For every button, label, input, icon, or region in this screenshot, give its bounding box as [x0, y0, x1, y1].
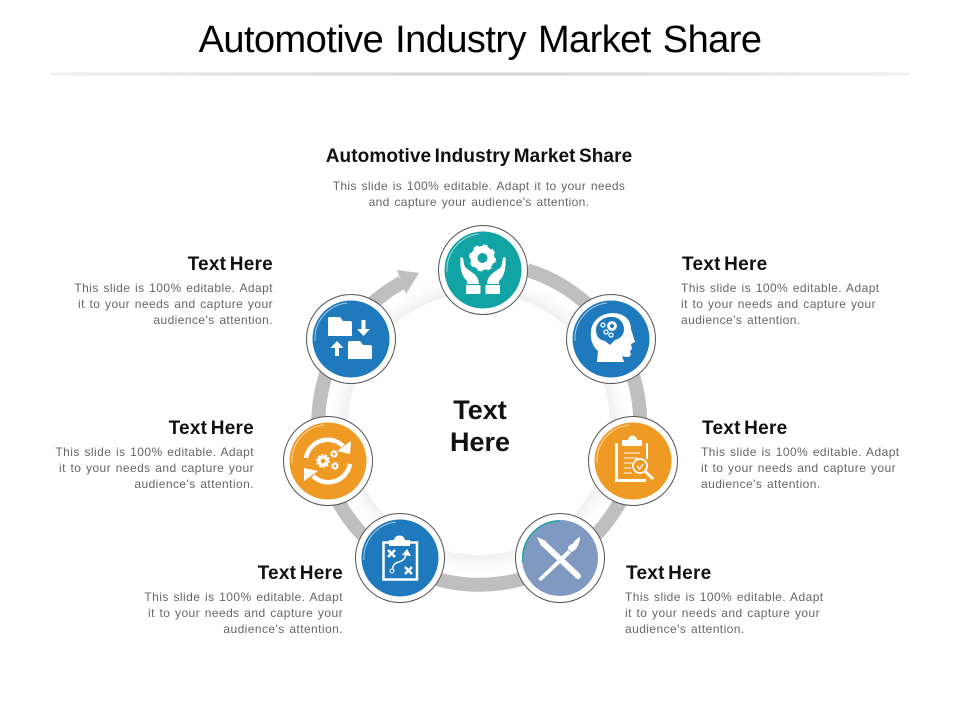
- heading: Text Here: [169, 418, 254, 439]
- text block: upper left: [74, 254, 273, 327]
- description: it to your needs and capture your: [625, 606, 820, 620]
- description: audience's attention.: [625, 622, 745, 636]
- description: [55, 445, 254, 491]
- description: [701, 445, 900, 491]
- heading: Text Here: [258, 563, 343, 584]
- description: This slide is 100% editable. Adapt: [625, 590, 824, 604]
- step 6 node: refresh with gears icon: [284, 416, 372, 506]
- description: it to your needs and capture your: [148, 606, 343, 620]
- description: [625, 590, 824, 636]
- description: This slide is 100% editable. Adapt: [144, 590, 343, 604]
- heading: Text Here: [682, 254, 767, 275]
- step 4 node: crossed pen and brush icon: [516, 514, 604, 602]
- description: This slide is 100% editable. Adapt: [74, 281, 273, 295]
- description: audience's attention.: [681, 313, 801, 327]
- text block: middle left: [55, 418, 254, 491]
- icon: clipboard with magnifier: [616, 436, 653, 480]
- text block: top: [326, 146, 632, 209]
- description: it to your needs and capture your: [681, 297, 876, 311]
- title underline: [50, 72, 910, 76]
- cycle arrow ring: [318, 270, 640, 585]
- title: Automotive Industry Market Share: [199, 19, 761, 61]
- text block: middle right: [701, 418, 900, 491]
- top heading: Automotive Industry Market Share: [326, 146, 632, 167]
- description: audience's attention.: [134, 477, 254, 491]
- description: audience's attention.: [153, 313, 273, 327]
- top description: and capture your audience's attention.: [369, 195, 589, 209]
- description: audience's attention.: [701, 477, 821, 491]
- description: [681, 281, 880, 327]
- step 2 node: head with gears icon: [566, 294, 656, 384]
- center label: Here: [450, 427, 510, 457]
- text block: lower right: [625, 563, 824, 636]
- top description: [333, 179, 625, 209]
- text block: lower left: [144, 563, 343, 636]
- description: audience's attention.: [223, 622, 343, 636]
- description: This slide is 100% editable. Adapt: [701, 445, 900, 459]
- icon: crossed tools: [537, 537, 581, 581]
- icon: head silhouette: [591, 313, 635, 362]
- top description: This slide is 100% editable. Adapt it to your needs: [333, 179, 625, 193]
- description: it to your needs and capture your: [59, 461, 254, 475]
- text block: upper right: [681, 254, 880, 327]
- center label: Text: [453, 395, 507, 425]
- heading: Text Here: [188, 254, 273, 275]
- description: This slide is 100% editable. Adapt: [55, 445, 254, 459]
- description: it to your needs and capture your: [701, 461, 896, 475]
- heading: Text Here: [702, 418, 787, 439]
- icon: gear in hands: [460, 246, 506, 294]
- description: [144, 590, 343, 636]
- step 5 node: strategy clipboard icon: [356, 514, 444, 602]
- icon: circular arrows and gears: [304, 440, 351, 482]
- step 1 node: hands and gear icon: [438, 226, 528, 314]
- inner light ring: [339, 284, 619, 564]
- description: it to your needs and capture your: [78, 297, 273, 311]
- icon: folders with arrows: [328, 317, 372, 359]
- heading: Text Here: [626, 563, 711, 584]
- description: [74, 281, 273, 327]
- step 3 node: clipboard and magnifier icon: [588, 416, 678, 506]
- step 7 node: folders exchange icon: [306, 294, 396, 384]
- description: This slide is 100% editable. Adapt: [681, 281, 880, 295]
- icon: play diagram clipboard: [384, 536, 417, 580]
- center label: [450, 395, 510, 457]
